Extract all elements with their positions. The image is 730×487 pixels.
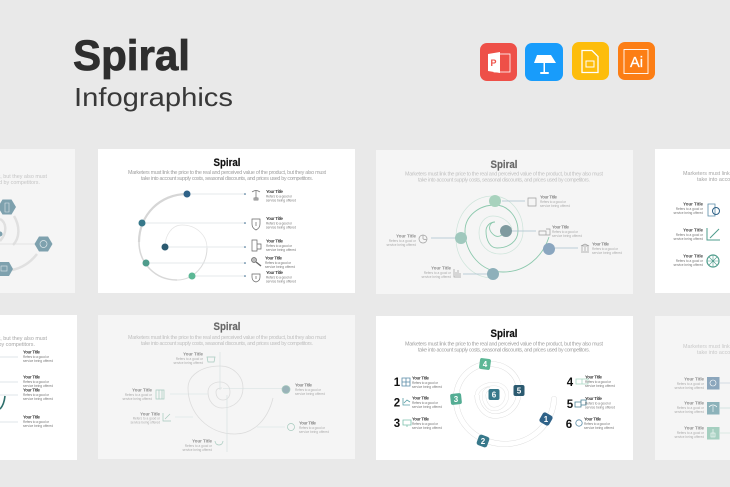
labels: service being offered <box>386 243 416 247</box>
labels <box>23 350 53 428</box>
panel: cropped hexagon slide <box>0 149 75 293</box>
labels: Refers to a good or <box>185 444 213 448</box>
labels: service being offered <box>412 426 442 430</box>
labels <box>386 194 622 279</box>
panel: numbered spiral slide <box>376 316 633 460</box>
labels: service being offered <box>674 410 704 414</box>
labels: Your Title <box>265 256 283 260</box>
nodes <box>138 190 196 280</box>
numbers: 6 <box>566 419 572 431</box>
labels: Refers to a good or <box>552 230 579 234</box>
labels: service being offered <box>122 397 152 401</box>
labels: Refers to a good or <box>176 357 204 361</box>
numbers: 5 <box>567 399 574 411</box>
labels: service being offered <box>23 359 53 363</box>
labels: Your Title <box>23 350 41 354</box>
labels: Your Title <box>23 414 41 420</box>
labels: Refers to a good or <box>412 401 439 405</box>
labels: Your Title <box>683 228 704 232</box>
nodes <box>455 195 555 280</box>
description: take into account supply costs, seasonal discounts, and prices used by competitors. <box>141 176 313 182</box>
icons <box>707 204 720 267</box>
labels: Refers to a good or <box>676 259 704 263</box>
labels: Refers to a good or <box>266 194 293 198</box>
labels: Your Title <box>299 420 317 426</box>
labels: service being offered <box>592 251 622 255</box>
labels: Your Title <box>183 352 204 356</box>
description: Marketers must link the price to the real and perceived value of the product, but they also must <box>128 335 326 341</box>
labels: Refers to a good or <box>540 200 567 204</box>
labels: Refers to a good or <box>585 380 612 384</box>
icon: Keynote <box>525 43 563 81</box>
panel: spiral timeline slide <box>98 149 355 293</box>
labels: Your Title <box>584 416 602 422</box>
spiral <box>456 196 549 278</box>
labels: service being offered <box>673 211 703 215</box>
labels: Refers to a good or <box>592 247 619 251</box>
icon: PowerPoint: P <box>490 58 497 68</box>
labels: service being offered <box>265 265 295 269</box>
labels: Refers to a good or <box>266 276 293 280</box>
labels: service being offered <box>266 226 296 230</box>
labels: Your Title <box>23 388 41 392</box>
labels: Your Title <box>140 412 161 416</box>
description <box>405 342 604 354</box>
labels: Refers to a good or <box>389 239 417 243</box>
icons <box>252 190 261 282</box>
labels: Refers to a good or <box>266 244 293 248</box>
spiral <box>139 194 207 280</box>
description: Marketers must link the price to the real and perceived value of the product, but they also must <box>128 170 326 176</box>
numbers: 3 <box>394 418 400 430</box>
icon: hexagon top <box>0 200 16 214</box>
icon: Illustrator: Ai <box>630 54 643 71</box>
description <box>128 170 326 182</box>
panel: cropped square icons slide bottom right <box>655 316 730 460</box>
labels <box>412 374 615 430</box>
numbers: 2 <box>394 398 400 410</box>
nodes <box>450 358 554 448</box>
labels: Refers to a good or <box>23 355 50 359</box>
description: Marketers must link the price to the real and perceived value of the product, but they also must <box>405 342 604 348</box>
labels: service being offered <box>584 426 614 430</box>
labels: service being offered <box>182 448 212 452</box>
labels: service being offered <box>173 361 203 365</box>
labels: Refers to a good or <box>677 382 705 386</box>
labels: service being offered <box>23 397 53 401</box>
description <box>128 335 326 347</box>
numbers: 4 <box>567 377 574 389</box>
connector lines <box>431 201 578 274</box>
nodes: 1 <box>544 415 549 424</box>
labels: service being offered <box>266 280 296 284</box>
connector lines <box>142 194 245 276</box>
labels: Refers to a good or <box>295 388 322 392</box>
icons <box>156 357 294 445</box>
numbers: 1 <box>394 377 401 389</box>
labels: Refers to a good or <box>677 431 705 435</box>
description <box>405 172 604 184</box>
labels: service being offered <box>266 198 296 202</box>
labels: Refers to a good or <box>584 422 611 426</box>
labels: Refers to a good or <box>412 422 439 426</box>
labels: service being offered <box>421 275 451 279</box>
labels: service being offered <box>299 430 329 434</box>
labels: Your Title <box>684 426 705 430</box>
labels: service being offered <box>585 384 615 388</box>
labels: Your Title <box>192 438 213 444</box>
icon: hexagon bottom <box>0 262 13 276</box>
connector lines <box>170 352 285 452</box>
labels: service being offered <box>673 237 703 241</box>
arrow dots <box>244 193 246 277</box>
labels: service being offered <box>295 392 325 396</box>
labels: Your Title <box>585 374 603 380</box>
panel: thin spiral slide <box>98 315 355 459</box>
description: Marketers must link the price to the real and perceived value of the product, but they also must <box>405 172 604 178</box>
icon: hexagon middle <box>34 236 52 252</box>
spiral fragment <box>0 396 5 409</box>
panel: cropped slide bottom left <box>0 315 77 460</box>
description: take into account supply costs, seasonal discounts, and prices used by competitors. <box>418 178 590 184</box>
labels: Refers to a good or <box>299 426 326 430</box>
labels: Refers to a good or <box>266 222 293 226</box>
labels: Refers to a good or <box>676 233 704 237</box>
numbers <box>394 377 574 431</box>
labels: Refers to a good or <box>677 406 705 410</box>
labels: Your Title <box>412 416 430 422</box>
labels: service being offered <box>585 406 615 410</box>
labels: Your Title <box>431 266 452 270</box>
heading: Spiral <box>490 159 518 171</box>
labels: service being offered <box>23 424 53 428</box>
icon: PowerPoint <box>480 43 517 81</box>
heading: Spiral <box>214 157 240 169</box>
labels: service being offered <box>540 204 570 208</box>
spiral <box>456 364 554 444</box>
labels <box>674 376 705 439</box>
labels: Your Title <box>585 396 603 401</box>
labels: Refers to a good or <box>23 380 50 384</box>
labels: Your Title <box>266 238 284 244</box>
labels: Your Title <box>266 216 284 221</box>
labels: Your Title <box>295 382 313 388</box>
labels: service being offered <box>412 405 442 409</box>
icons <box>419 198 589 277</box>
labels: Your Title <box>592 242 610 246</box>
icon: Google Slides <box>572 42 609 80</box>
labels: Refers to a good or <box>676 207 704 211</box>
labels: service being offered <box>552 234 582 238</box>
labels: Your Title <box>684 400 705 406</box>
labels: service being offered <box>673 263 703 267</box>
spiral <box>188 366 273 434</box>
labels: Refers to a good or <box>412 381 439 385</box>
labels <box>122 352 329 452</box>
description: take into account supply costs, seasonal discounts, and prices used by competitors. <box>418 348 590 354</box>
labels: Your Title <box>396 234 417 238</box>
icons <box>402 378 588 427</box>
labels: Refers to a good or <box>23 393 50 397</box>
labels: Refers to a good or <box>133 416 161 420</box>
labels: Refers to a good or <box>265 261 292 265</box>
icon: Illustrator <box>618 42 655 80</box>
labels: Your Title <box>683 254 704 258</box>
labels: Your Title <box>552 224 570 230</box>
panel: cropped hexagon slide: d by competitors. <box>0 180 40 186</box>
labels: Your Title <box>266 270 284 275</box>
labels: Your Title <box>23 374 41 380</box>
labels: Your Title <box>540 194 558 200</box>
nodes: 5 <box>517 386 522 396</box>
subtitle: Infographics <box>74 82 233 112</box>
labels: service being offered <box>674 386 704 390</box>
labels: Refers to a good or <box>585 402 612 406</box>
labels: service being offered <box>130 420 160 424</box>
labels: Your Title <box>683 202 704 206</box>
square icons <box>707 377 720 440</box>
heading: Spiral <box>490 328 518 340</box>
nodes: 6 <box>492 390 497 400</box>
labels: service being offered <box>23 384 53 388</box>
nodes: 3 <box>454 395 459 404</box>
labels: Your Title <box>412 396 430 400</box>
labels: Your Title <box>412 376 430 380</box>
labels <box>265 189 296 284</box>
panel: green spiral slide <box>376 150 633 294</box>
labels: Your Title <box>266 189 284 194</box>
connector lines <box>719 383 730 433</box>
heading: Spiral <box>214 321 240 333</box>
panel: cropped icons slide top right <box>655 149 730 293</box>
labels: Your Title <box>132 388 153 392</box>
labels: service being offered <box>266 248 296 252</box>
labels: service being offered <box>412 385 442 389</box>
nodes: 2 <box>481 437 486 446</box>
nodes: 4 <box>483 360 488 369</box>
labels: Refers to a good or <box>424 271 452 275</box>
description: take into account supply costs, seasonal discounts, and prices used by competitors. <box>141 341 313 347</box>
labels <box>673 202 704 267</box>
labels: service being offered <box>674 435 704 439</box>
title: Spiral <box>73 32 190 80</box>
labels: Refers to a good or <box>23 420 50 424</box>
labels: Refers to a good or <box>125 393 153 397</box>
labels: Your Title <box>684 376 705 382</box>
